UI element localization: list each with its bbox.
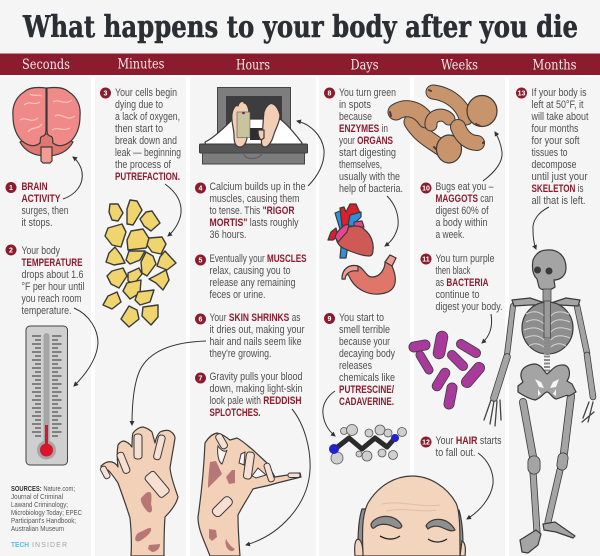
text: step 7 reddish splotches: [195, 371, 302, 419]
text: step 10 maggots: a body within: [436, 217, 488, 229]
text: step 8 enzymes: themselves,: [339, 159, 382, 171]
text: step 12 hair: [420, 435, 502, 459]
text: step 13 skeleton: [516, 87, 588, 207]
text: step 8 enzymes: because: [339, 111, 372, 123]
icon: yellow tissue chunks: [103, 200, 176, 327]
header band with time periods: Months: [532, 58, 577, 74]
text: step 9 putrescine: [324, 312, 395, 408]
text: step 4 rigor mortis: Calcium builds up in the: [210, 181, 306, 193]
text: sources: SOURCES: Nature.com;: [11, 484, 75, 493]
text: step 7 reddish splotches: SPLOTCHES.: [210, 407, 260, 419]
icon: feet on morgue drawer: [200, 88, 308, 164]
arrow: to head: [467, 453, 493, 519]
text: step 2 temperature: 2: [9, 248, 13, 254]
arrow: to right hand: [246, 409, 310, 545]
text: step 9 putrescine: You start to: [339, 312, 384, 324]
arrow: to molecule: [323, 391, 335, 436]
text: step 4 rigor mortis: muscles, causing them: [210, 193, 300, 205]
text: step 10 maggots: Bugs eat you –: [436, 181, 494, 193]
text: step 13 skeleton: If your body is: [532, 87, 587, 99]
text: step 6 skin shrinks: hair and nails seem like: [210, 336, 302, 348]
header band with time periods: [0, 54, 600, 75]
text: step 5 muscles: release any remaining: [210, 277, 296, 289]
text: step 5 muscles: feces or urine.: [210, 289, 266, 301]
text: step 10 maggots: MAGGOTS can: [436, 193, 494, 205]
text: step 13 skeleton: decompose: [532, 159, 576, 171]
text: step 12 hair: Your HAIR starts: [436, 435, 502, 447]
text: step 9 putrescine: chemicals like: [339, 372, 395, 384]
text: step 6 skin shrinks: 6: [199, 316, 203, 324]
text: step 3 putrefaction: a lack of oxygen,: [115, 111, 180, 123]
text: step 5 muscles: [195, 253, 306, 301]
text: step 8 enzymes: ENZYMES in: [339, 123, 388, 135]
header band with time periods: Minutes: [118, 56, 165, 72]
header band with time periods: Days: [350, 58, 379, 74]
text: step 13 skeleton: all that is left.: [532, 195, 586, 207]
text: step 4 rigor mortis: 36 hours.: [210, 229, 246, 241]
text: step 2 temperature: Your body: [22, 245, 60, 257]
text: step 13 skeleton: left at 50°F, it: [532, 99, 584, 111]
text: sources: Lawand Criminology;: [11, 500, 68, 509]
text: step 9 putrescine: PUTRESCINE/: [339, 384, 394, 396]
text: step 11 bacteria: digest your body.: [436, 301, 502, 313]
arrow: to thermometer: [74, 308, 98, 386]
text: step 9 putrescine: smell terrible: [339, 324, 390, 336]
icon: maggots: [390, 90, 497, 163]
text: step 3 putrefaction: dying due to: [115, 99, 163, 111]
text: step 9 putrescine: releases: [339, 360, 372, 372]
text: step 6 skin shrinks: they're growing.: [210, 348, 272, 360]
arrow: to maggots: [483, 132, 502, 181]
arrow: to left hand: [132, 341, 206, 425]
text: step 1 brain activity: it stops.: [22, 217, 52, 229]
text: step 8 enzymes: start digesting: [339, 147, 396, 159]
text: step 13 skeleton: tissues to: [532, 147, 568, 159]
text: sources: Australian Museum: [11, 524, 64, 533]
text: step 9 putrescine: because your: [339, 336, 390, 348]
header band with time periods: Seconds: [22, 57, 70, 73]
text: step 1 brain activity: ACTIVITY: [22, 193, 61, 205]
header band with time periods: Hours: [236, 58, 270, 74]
text: step 12 hair: 12: [422, 440, 430, 446]
text: step 5 muscles: Eventually your MUSCLES: [210, 253, 306, 265]
text: step 3 putrefaction: then start to: [115, 123, 163, 135]
arrow: to bacteria: [482, 314, 492, 343]
text: step 8 enzymes: 8: [328, 90, 332, 98]
text: step 3 putrefaction: [100, 87, 181, 183]
text: step 8 enzymes: in spots: [339, 99, 371, 111]
text: step 6 skin shrinks: Your SKIN SHRINKS as: [210, 312, 301, 324]
text: step 4 rigor mortis: 4: [199, 186, 203, 192]
logo: Tech Insider: INSIDER: [32, 542, 67, 549]
text: step 7 reddish splotches: 7: [199, 376, 203, 382]
arrow: to brain: [63, 157, 82, 199]
icon: brain: [13, 87, 80, 163]
text: step 3 putrefaction: 3: [104, 90, 108, 98]
text: step 10 maggots: [420, 181, 494, 241]
text: sources: Participant's Handbook;: [11, 516, 76, 525]
text: step 9 putrescine: 9: [328, 316, 332, 323]
text: step 6 skin shrinks: [195, 312, 305, 360]
icon: thermometer: [26, 326, 68, 465]
text: step 1 brain activity: surges, then: [22, 205, 68, 217]
text: step 2 temperature: [6, 244, 84, 317]
header band with time periods: Weeks: [441, 58, 478, 74]
text: step 4 rigor mortis: to tense. This "RIGOR: [210, 205, 295, 217]
text: step 11 bacteria: [420, 253, 502, 313]
icon: molecule: [329, 424, 406, 464]
text: step 9 putrescine: decaying body: [339, 348, 395, 360]
icon: stomach: [342, 255, 396, 294]
text: step 5 muscles: 5: [199, 258, 203, 264]
text: step 3 putrefaction: Your cells begin: [115, 87, 177, 99]
arrow: to morgue drawer: [297, 121, 324, 186]
text: step 1 brain activity: 1: [9, 185, 13, 192]
text: step 12 hair: to fall out.: [436, 447, 476, 459]
text: step 13 skeleton: for your soft: [532, 135, 580, 147]
text: step 4 rigor mortis: MORTIS" lasts roughly: [210, 217, 299, 229]
text: step 13 skeleton: SKELETON is: [532, 183, 584, 195]
text: step 9 putrescine: CADAVERINE.: [339, 396, 394, 408]
text: step 6 skin shrinks: it dries out, making your: [210, 324, 305, 336]
text: step 11 bacteria: 11: [422, 256, 430, 264]
text: step 11 bacteria: continue to: [436, 289, 480, 301]
text: step 10 maggots: a week.: [436, 229, 464, 241]
arrow: to tissue chunks: [165, 184, 181, 236]
text: step 3 putrefaction: the process of: [115, 159, 172, 171]
text: step 8 enzymes: your ORGANS: [339, 135, 393, 147]
text: step 8 enzymes: help of bacteria.: [339, 183, 403, 195]
text: step 2 temperature: TEMPERATURE: [22, 257, 82, 269]
text: step 1 brain activity: BRAIN: [22, 181, 48, 193]
logo: Tech Insider: [11, 542, 67, 549]
text: step 10 maggots: 10: [422, 186, 430, 192]
text: sources: Microbiology Today; EPEC: [11, 508, 82, 517]
arrow: to skeleton: [533, 207, 549, 249]
text: step 3 putrefaction: leak — beginning: [115, 147, 181, 159]
text: step 7 reddish splotches: down, making light-skin: [210, 383, 302, 395]
text: step 13 skeleton: will take about: [531, 111, 588, 123]
icon: right hand: [198, 433, 301, 556]
icon: skeleton: [484, 250, 594, 553]
text: step 7 reddish splotches: look pale with REDDISH: [210, 395, 302, 407]
text: step 10 maggots: digest 60% of: [436, 205, 489, 217]
text: step 11 bacteria: then black: [436, 265, 471, 277]
icon: bacteria: [414, 337, 479, 404]
icon: left hand: [100, 427, 178, 556]
text: step 11 bacteria: You turn purple: [436, 253, 494, 265]
icon: balding head: [355, 476, 465, 556]
text: sources: Journal of Criminal: [11, 492, 63, 501]
text: step 3 putrefaction: PUTREFACTION.: [115, 171, 180, 183]
text: step 4 rigor mortis: [195, 181, 306, 241]
text: step 2 temperature: you reach room: [22, 293, 82, 305]
text: step 8 enzymes: You turn green: [339, 87, 396, 99]
text: step 11 bacteria: as BACTERIA: [436, 277, 489, 289]
text: step 3 putrefaction: break down and: [115, 135, 177, 147]
text: step 7 reddish splotches: Gravity pulls your blood: [210, 371, 302, 383]
text: step 8 enzymes: usually with the: [339, 171, 400, 183]
text: step 13 skeleton: until just your: [532, 171, 588, 183]
text: step 5 muscles: relax, causing you to: [210, 265, 290, 277]
text: step 13 skeleton: four months: [532, 123, 579, 135]
text: sources: [11, 484, 82, 533]
text: step 2 temperature: temperature.: [22, 305, 72, 317]
text: step 2 temperature: drops about 1.6: [22, 269, 84, 281]
arrow: to organs: [385, 196, 398, 246]
logo: Tech Insider: TECH: [11, 542, 29, 549]
text: step 13 skeleton: 13: [518, 90, 525, 98]
text: step 8 enzymes: [324, 87, 403, 195]
icon: heart: [328, 204, 373, 258]
text: step 1 brain activity: [6, 181, 68, 229]
text: step 2 temperature: °F per hour until: [22, 281, 84, 293]
